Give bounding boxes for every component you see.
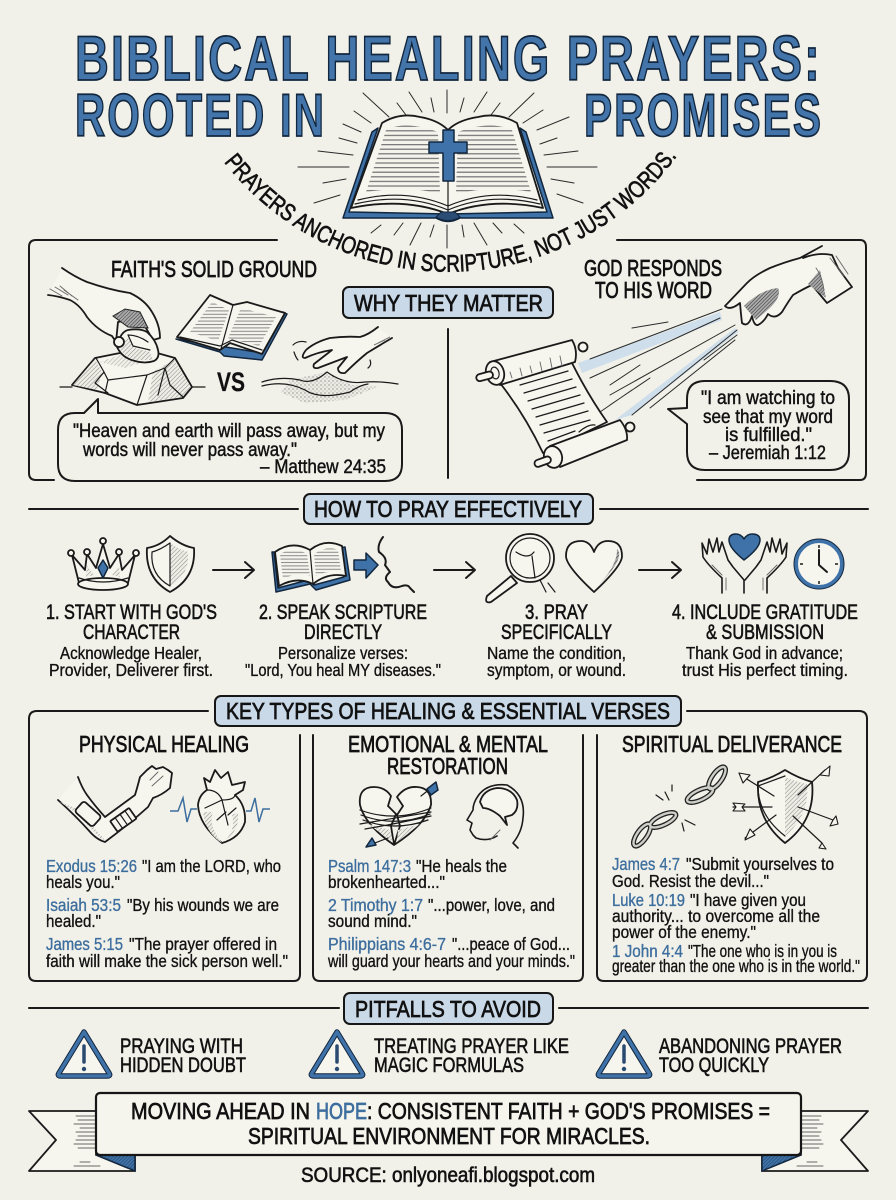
verses: "Submit yourselves to: [686, 854, 834, 874]
icon: scroll: [475, 340, 634, 470]
icon: blue arrow: [354, 553, 378, 578]
heading: god responds to his word: GOD RESPONDS: [584, 255, 722, 281]
panel: emotional and mental restoration: [313, 731, 583, 981]
heading: RESTORATION: [387, 753, 508, 779]
heading: EMOTIONAL & MENTAL: [348, 731, 548, 757]
heading: why they matter: WHY THEY MATTER: [354, 290, 543, 316]
pitfall 1: HIDDEN DOUBT: [120, 1054, 246, 1077]
heading: [348, 731, 548, 779]
label: PRAYING WITH: [120, 1035, 243, 1058]
description: Acknowledge Healer,: [60, 643, 202, 663]
step 3: SPECIFICALLY: [501, 621, 612, 644]
banner text: [131, 1098, 770, 1149]
icon: bandaged broken heart: [360, 782, 438, 847]
icon: shield with arrows: [733, 766, 838, 849]
verses: 2 Timothy 1:7: [328, 895, 423, 915]
icon: broken chain: [630, 764, 729, 849]
verses: sound mind.": [328, 911, 417, 931]
book cover: [343, 128, 553, 222]
heading: pitfalls: PITFALLS TO AVOID: [355, 996, 541, 1022]
step 2: "Lord, You heal MY diseases.": [245, 660, 441, 680]
verses: [327, 856, 575, 971]
heading: key types: KEY TYPES OF HEALING & ESSENTIAL VERSES: [226, 698, 670, 724]
heading: faith's solid ground: FAITH'S SOLID GROUND: [111, 256, 317, 282]
heading: god responds to his word: [584, 255, 722, 303]
icon: head with brain: [467, 785, 523, 848]
pitfall 3: [598, 1032, 842, 1077]
source line: SOURCE: onlyoneafi.blogspot.com: [301, 1164, 595, 1187]
panel: physical healing: [29, 711, 300, 981]
rays: [298, 90, 597, 248]
step 1: Provider, Deliverer first.: [49, 660, 213, 680]
callout: Jeremiah 1:12: "I am watching to: [701, 387, 835, 409]
icon: open bible with cross and rays: [298, 90, 597, 248]
pitfall 2: MAGIC FORMULAS: [374, 1054, 524, 1077]
verses: "By his wounds we are: [127, 895, 279, 915]
pitfall 3: TOO QUICKLY: [659, 1054, 769, 1077]
panel: spiritual deliverance: [597, 711, 867, 981]
verses: authority... to overcome all the: [612, 906, 820, 926]
banner text: : CONSISTENT FAITH + GOD'S PROMISES =: [367, 1098, 770, 1124]
callout: Jeremiah 1:12: see that my word: [703, 406, 833, 428]
icon: book: [272, 543, 350, 592]
step 2: [245, 537, 441, 680]
icon: speaking profile: [378, 537, 414, 592]
verses: "The prayer offered in: [129, 934, 277, 954]
icon: crown: [68, 538, 139, 590]
divider: [29, 508, 868, 510]
verses: "He heals the: [416, 856, 507, 876]
heading: how to pray: HOW TO PRAY EFFECTIVELY: [314, 496, 582, 522]
curved subtitle: PRAYERS ANCHORED IN SCRIPTURE, NOT JUST WORDS.: [224, 152, 676, 272]
label: 3. PRAY: [525, 601, 588, 624]
icon: warning triangle: [311, 1032, 363, 1076]
description: Thank God in advance;: [686, 643, 843, 663]
verses: James 4:7: [612, 854, 680, 874]
verses: "...peace of God...: [452, 934, 570, 954]
icon: reaching hand: [725, 246, 852, 325]
verses: will guard your hearts and your minds.": [327, 951, 575, 971]
banner: [29, 1093, 868, 1171]
callout: Matthew 24:35: – Matthew 24:35: [260, 456, 386, 478]
verses: brokenhearted...": [328, 872, 445, 892]
arrow: [434, 562, 475, 578]
divider: [29, 1007, 868, 1009]
verses: Psalm 147:3: [328, 856, 411, 876]
verses: "I am the LORD, who: [142, 856, 281, 876]
heading: PHYSICAL HEALING: [79, 731, 249, 757]
step 3: [486, 534, 626, 680]
step 2: DIRECTLY: [304, 621, 382, 644]
title: [75, 24, 823, 149]
verses: Philippians 4:6-7: [328, 934, 446, 954]
callout: Jeremiah 1:12: [668, 381, 849, 470]
callout: Matthew 24:35: "Heaven and earth will pass away, but my: [73, 420, 385, 442]
callout: Jeremiah 1:12: – Jeremiah 1:12: [709, 442, 826, 464]
step 1: CHARACTER: [83, 621, 180, 644]
description: Personalize verses:: [278, 643, 408, 663]
label: 2. SPEAK SCRIPTURE: [259, 601, 427, 624]
icon: warning triangle: [598, 1032, 650, 1076]
banner text: HOPE: [316, 1098, 367, 1124]
cross: [429, 130, 467, 181]
panel: why they matter: [29, 240, 866, 481]
title: ROOTED IN: [75, 82, 326, 149]
verses: [612, 854, 860, 976]
verses: faith will make the sick person well.": [46, 951, 288, 971]
description: Name the condition,: [487, 643, 626, 663]
icon: ecg left: [170, 798, 197, 822]
verses: power of the enemy.": [612, 922, 756, 942]
label: 1. START WITH GOD'S: [46, 601, 217, 624]
icon: blue heart: [729, 534, 760, 560]
icon: small open book: [176, 295, 287, 360]
verses: [46, 856, 288, 971]
label: VS: VS: [217, 367, 245, 397]
ribbon main: [96, 1093, 801, 1155]
step 4: trust His perfect timing.: [682, 660, 848, 680]
icon: heart: [566, 541, 622, 592]
ribbon shading: [74, 1116, 823, 1166]
verses: Exodus 15:26: [46, 856, 137, 876]
icon: anatomical heart: [198, 770, 245, 843]
step 1: [46, 536, 217, 680]
pages: [351, 115, 543, 214]
pitfall 2: [311, 1032, 569, 1077]
banner text: SPIRITUAL ENVIRONMENT FOR MIRACLES.: [248, 1123, 650, 1149]
panel frame: [29, 240, 866, 480]
verses: 1 John 4:4: [612, 941, 683, 961]
icon: shield: [147, 536, 194, 592]
icon: magnifying glass: [486, 534, 555, 602]
icon: warning triangle: [58, 1032, 110, 1076]
callout: Matthew 24:35: words will never pass away.": [82, 439, 297, 461]
verses: "I have given you: [690, 890, 806, 910]
icon: hand on rock: [48, 268, 205, 405]
step 3: symptom, or wound.: [487, 660, 626, 680]
label: ABANDONING PRAYER: [659, 1035, 842, 1058]
icon: light beams: [578, 309, 738, 420]
icon: hand in sand: [262, 327, 398, 403]
callout: Jeremiah 1:12: is fulfilled.": [725, 424, 812, 446]
heading: god responds to his word: TO HIS WORD: [595, 277, 712, 303]
verses: James 5:15: [46, 934, 123, 954]
section: key types of healing: [29, 696, 867, 981]
icon: bandaged arm: [58, 766, 172, 842]
pitfall 1: [58, 1032, 246, 1077]
step 4: [672, 534, 858, 680]
verses: "...power, love, and: [428, 895, 555, 915]
callout: Matthew 24:35: [58, 399, 402, 481]
icon: ecg right: [246, 798, 270, 822]
verses: Luke 10:19: [612, 890, 685, 910]
verses: Isaiah 53:5: [46, 895, 121, 915]
ribbon folds: [96, 1155, 801, 1171]
arrow: [639, 562, 681, 578]
verses: heals you.": [46, 872, 120, 892]
verses: healed.": [46, 911, 101, 931]
section: how to pray effectively: [29, 494, 868, 680]
verses: God. Resist the devil...": [612, 871, 769, 891]
icon: open hands: [702, 538, 787, 593]
label: TREATING PRAYER LIKE: [374, 1035, 569, 1058]
icon: clock: [794, 539, 844, 589]
arrow: [213, 562, 254, 578]
section: pitfalls to avoid: [29, 993, 868, 1077]
step 4: & SUBMISSION: [706, 621, 824, 644]
ribbon tails: [29, 1111, 868, 1171]
verses: "The one who is in you is: [688, 941, 837, 961]
banner text: MOVING AHEAD IN: [131, 1098, 310, 1124]
